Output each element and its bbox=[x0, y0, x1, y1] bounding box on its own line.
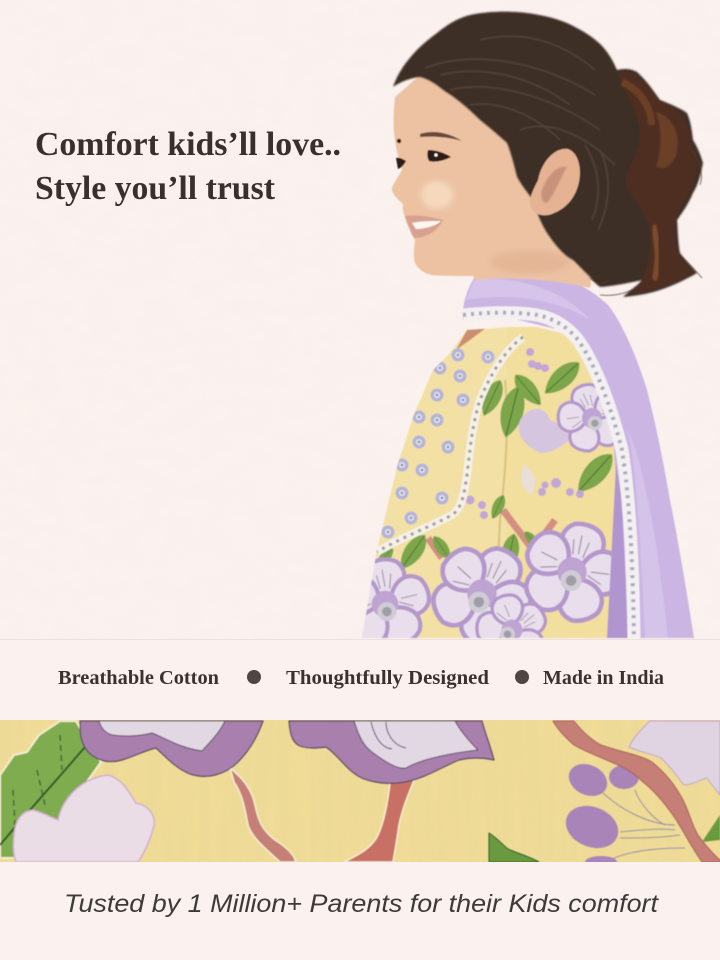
stem one bbox=[230, 768, 296, 862]
benefit: breathable cotton: Breathable Cotton bbox=[58, 667, 219, 689]
trust tagline: Tusted by 1 Million+ Parents for their Kids comfort bbox=[64, 890, 659, 918]
headline bbox=[35, 126, 341, 207]
headline: Style you’ll trust bbox=[35, 170, 276, 207]
small yoke motifs bbox=[442, 440, 454, 454]
hair bbox=[393, 12, 703, 297]
stem two bbox=[344, 778, 415, 862]
pale flower left bbox=[13, 775, 154, 862]
small green leaf bbox=[489, 833, 539, 862]
dupatta back drape bbox=[463, 272, 694, 638]
purple petal one bbox=[80, 721, 263, 776]
stem three bbox=[553, 721, 720, 862]
leaves bbox=[544, 362, 580, 394]
purple buds bbox=[466, 348, 584, 519]
sleeve fold bbox=[498, 380, 508, 546]
dupatta inner shadow bbox=[607, 465, 628, 638]
pink stems bbox=[428, 510, 555, 558]
yoke lace trim bbox=[377, 337, 523, 552]
headline: Comfort kids’ll love.. bbox=[35, 126, 341, 163]
bullet bbox=[515, 670, 529, 684]
benefits strip bbox=[0, 639, 720, 720]
pale flower right bbox=[629, 721, 720, 795]
hair highlights bbox=[425, 36, 615, 230]
ear bbox=[530, 149, 580, 215]
large print flowers bbox=[362, 556, 432, 638]
facial features bbox=[396, 132, 462, 238]
benefit: thoughtfully designed: Thoughtfully Designed bbox=[286, 667, 489, 689]
green leaf bbox=[0, 721, 101, 858]
pale mauve bloom on sleeve bbox=[519, 409, 572, 453]
dupatta lace border bbox=[463, 313, 634, 638]
benefit: made in india: Made in India bbox=[543, 667, 664, 689]
right corner leaf bbox=[702, 815, 720, 842]
fabric print close-up band bbox=[0, 720, 720, 868]
purple petal two bbox=[289, 721, 494, 783]
loose hair wisps bbox=[590, 150, 702, 295]
skin neckline bbox=[456, 328, 485, 349]
purple buds with stamens bbox=[565, 764, 686, 862]
ponytail bun bbox=[618, 71, 697, 294]
bullet bbox=[247, 670, 261, 684]
girl in kurta and dupatta bbox=[362, 10, 704, 638]
skin neck and face bbox=[392, 70, 600, 288]
kurta body bbox=[362, 326, 616, 638]
